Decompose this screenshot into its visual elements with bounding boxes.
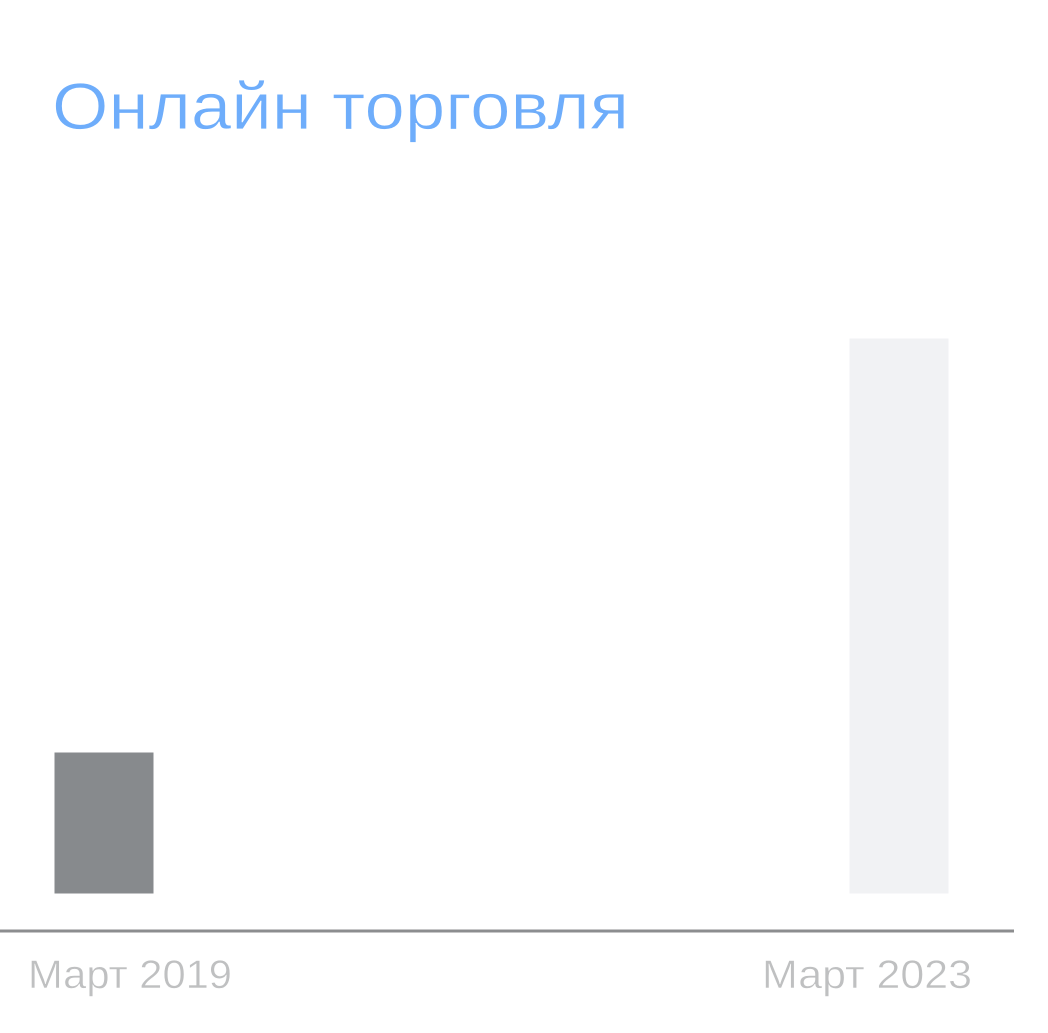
axis label: March 2019: Март 2019	[28, 953, 232, 997]
axis label: March 2023: Март 2023	[762, 953, 972, 997]
axis line	[0, 930, 1014, 932]
title: Онлайн торговля	[52, 69, 629, 143]
bar: March 2023	[850, 338, 948, 894]
bar: March 2019	[54, 752, 154, 894]
